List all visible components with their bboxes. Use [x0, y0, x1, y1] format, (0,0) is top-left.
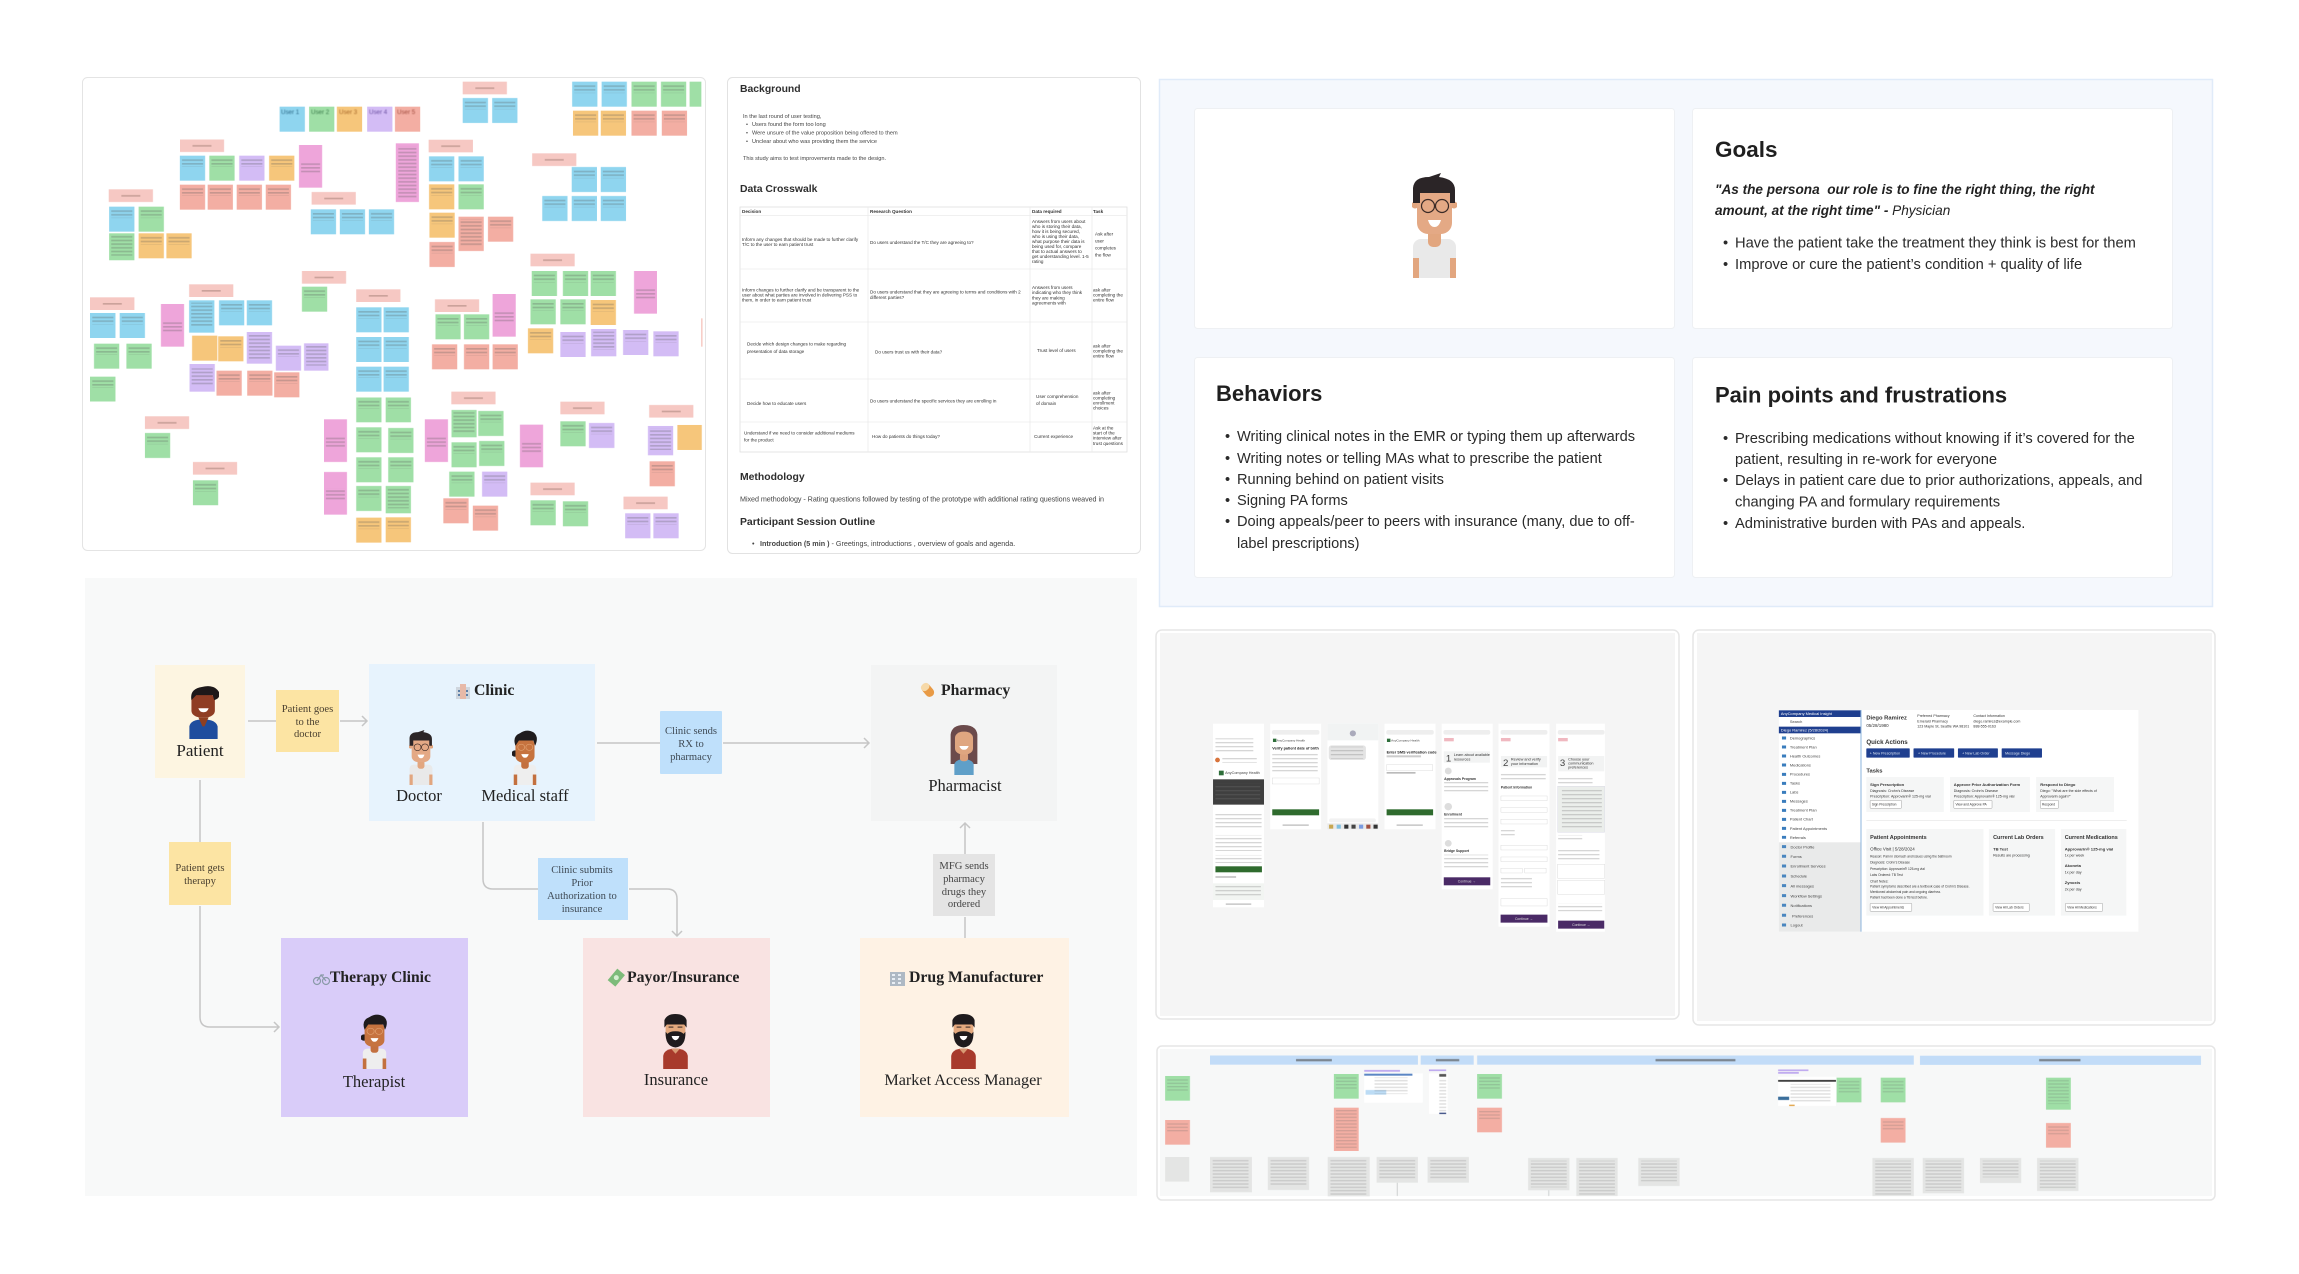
- heading: background: Background: [740, 84, 801, 95]
- text: background summary: Users found the form too long: [752, 122, 826, 128]
- icon: market access manager avatar: [951, 1014, 976, 1069]
- note: patient goes to the doctor: [276, 690, 339, 752]
- summary cards: Labs Ordered: TB Test: [1870, 873, 1903, 877]
- summary cards: Patient Appointments: [1870, 835, 1927, 841]
- heading: pain points and frustrations: Pain points and frustrations: [1715, 382, 2007, 408]
- note: clinic sends rx to pharmacy: Clinic sends: [665, 726, 717, 737]
- text: background summary: [743, 114, 898, 162]
- text: session outline item: - Greetings, introductions , overview of goals and agenda.: [831, 539, 1015, 548]
- table: data crosswalk: interview after: [1093, 436, 1122, 440]
- table: data crosswalk: start of the: [1093, 430, 1115, 436]
- table: data crosswalk: ask after: [1093, 344, 1111, 348]
- tasks: Sign Prescription: [1872, 803, 1897, 807]
- label: insurance: Insurance: [644, 1070, 708, 1089]
- panel: research synthesis timeline: [1157, 1046, 2215, 1200]
- note: clinic submits prior authorization: insurance: [562, 904, 603, 915]
- icon: insurance avatar: [663, 1014, 688, 1069]
- screen: step 2 review information: Review and verify: [1511, 758, 1541, 762]
- heading: participant session outline: Participant Session Outline: [740, 517, 875, 528]
- text: background summary: This study aims to test improvements made to the design.: [743, 156, 886, 162]
- patient header: Emerald Pharmacy: [1917, 719, 1948, 723]
- table: data crosswalk: choices: [1093, 406, 1109, 410]
- list: goals: [1723, 236, 2136, 273]
- note connectors: [1397, 1183, 1549, 1196]
- list: pain points: Prescribing medications without knowing if it’s covered for the: [1735, 431, 2135, 447]
- user legend labels: User 4: [369, 109, 388, 116]
- icon: medical staff avatar: [511, 731, 537, 785]
- icon: bicycle: [314, 975, 330, 984]
- table: data crosswalk: presentation of data storage: [747, 349, 805, 354]
- screen: sms message: [1327, 724, 1378, 829]
- panel: research plan document: [728, 78, 1140, 554]
- summary cards: 2x per day: [2065, 887, 2082, 891]
- quick actions: [1866, 739, 2042, 758]
- summary cards: Results are processing: [1993, 854, 2030, 858]
- icon: pill: [919, 681, 936, 699]
- screen: step 3 preferences: Choose your: [1568, 758, 1590, 762]
- note: patient goes to the doctor: doctor: [294, 729, 321, 740]
- text: background summary: In the last round of user testing,: [743, 114, 822, 120]
- label: patient: Patient: [176, 741, 224, 760]
- sidebar: Diego Ramirez (5/28/2024): [1781, 727, 1829, 732]
- sidebar: Procedures: [1790, 772, 1810, 777]
- table: data crosswalk: Understand if we need to consider additional mediums: [744, 430, 855, 436]
- table: data crosswalk: entire flow: [1093, 354, 1115, 358]
- note: clinic sends rx to pharmacy: pharmacy: [670, 752, 713, 763]
- table: data crosswalk: of domain: [1036, 401, 1057, 406]
- list: pain points: [1723, 431, 2142, 532]
- screen: step 1 resources: Enrollment: [1444, 812, 1463, 816]
- table: data crosswalk: Current experience: [1034, 434, 1074, 439]
- table: data crosswalk: User comprehension: [1036, 394, 1079, 399]
- patient header: [1866, 714, 2020, 729]
- screen: step 3 preferences: 3: [1560, 758, 1565, 769]
- arrow: patient to therapy clinic: [200, 780, 279, 1032]
- note: mfg sends pharmacy drugs: MFG sends: [939, 861, 989, 872]
- card: persona portrait: [1194, 108, 1674, 328]
- sidebar: Health Outcomes: [1790, 753, 1820, 758]
- table: data crosswalk: for the product: [744, 438, 774, 442]
- tasks: Diego: "What are the side effects of: [2040, 789, 2097, 793]
- box: pharmacy: [871, 665, 1057, 821]
- sidebar: Doctor Profile: [1791, 844, 1814, 849]
- list: goals: Have the patient take the treatment they think is best for them: [1735, 236, 2136, 252]
- research notes: [1210, 1157, 2078, 1196]
- summary cards: TB Test: [1993, 846, 2009, 851]
- icon: therapist avatar: [360, 1015, 387, 1069]
- note: patient gets therapy: [169, 842, 231, 905]
- sidebar: Treatment Plan: [1790, 808, 1817, 813]
- list: pain points: •: [1723, 473, 1728, 489]
- table: data crosswalk: rating: [1032, 259, 1044, 264]
- sidebar: Labs: [1790, 790, 1798, 795]
- list: goals: •: [1723, 257, 1728, 273]
- summary cards: Current Lab Orders: [1993, 835, 2044, 841]
- tasks: [1866, 769, 2114, 812]
- summary cards: Akoneta: [2065, 863, 2082, 868]
- screen: step 2 review information: your information: [1511, 762, 1538, 766]
- note: clinic submits prior authorization: Authorization to: [547, 891, 617, 902]
- list: behaviors: •: [1225, 493, 1230, 509]
- table: data crosswalk: Decide how to educate users: [747, 401, 807, 406]
- heading: goals: Goals: [1715, 137, 1778, 162]
- list: pain points: changing PA and formulary requirements: [1735, 494, 2000, 510]
- table: data crosswalk: [740, 207, 1127, 452]
- user legend labels: User 2: [311, 109, 330, 116]
- sidebar: Search: [1790, 719, 1802, 724]
- icon: physician avatar: [1412, 173, 1458, 278]
- text: background summary: Were unsure of the value proposition being offered to them: [752, 130, 898, 136]
- table: data crosswalk: user: [1095, 238, 1104, 244]
- list: pain points: Delays in patient care due to prior authorizations, appeals, and: [1735, 473, 2142, 489]
- text: background summary: •: [746, 139, 748, 145]
- card: behaviors: [1194, 358, 1674, 578]
- screen: verify date of birth: [1270, 724, 1321, 829]
- screen: step 1 resources: resources: [1454, 757, 1470, 761]
- screen: verify date of birth: Verify patient date of birth: [1272, 747, 1320, 751]
- text: session outline item: Introduction (5 min ): [760, 539, 830, 548]
- heading: methodology: Methodology: [740, 472, 805, 483]
- list: pain points: Administrative burden with PAs and appeals.: [1735, 516, 2025, 532]
- list: behaviors: •: [1225, 429, 1230, 445]
- list: pain points: •: [1723, 516, 1728, 532]
- summary cards: Office Visit | 5/28/2024: [1870, 846, 1915, 851]
- sidebar: Preferences: [1792, 913, 1813, 918]
- table: data crosswalk: who is using their data,: [1032, 234, 1079, 239]
- list: goals: Improve or cure the patient’s condition + quality of life: [1735, 257, 2082, 273]
- table: data crosswalk: enrollment: [1093, 400, 1115, 406]
- patient header: diego.ramirez@example.com: [1973, 719, 2020, 723]
- user legend labels: [281, 109, 416, 116]
- text: session outline item: •: [752, 539, 755, 548]
- screen: sms verification code: Enter SMS verification code: [1387, 750, 1437, 754]
- table: data crosswalk: Do users trust us with their data?: [875, 350, 943, 354]
- list: pain points: •: [1723, 431, 1728, 447]
- summary cards: View All Appointments: [1872, 906, 1905, 910]
- box: payor insurance: [583, 938, 770, 1117]
- sidebar: Enrollment Services: [1791, 864, 1826, 869]
- title: payor insurance: Payor/Insurance: [627, 969, 739, 986]
- screen: step 2 review information: 2: [1503, 758, 1508, 769]
- panel: provider dashboard screen: [1693, 630, 2215, 1025]
- sidebar: Tasks: [1790, 781, 1800, 786]
- phase headers: [1210, 1055, 2201, 1065]
- table: data crosswalk: Trust level of users: [1037, 348, 1076, 353]
- summary cards: View All Medications: [2067, 906, 2097, 910]
- summary cards: Mentioned abdominal pain and ongoing diarrhea.: [1870, 890, 1941, 894]
- note: mfg sends pharmacy drugs: pharmacy: [943, 874, 986, 885]
- screen: email: AnyCompany Health: [1225, 771, 1260, 775]
- summary cards: Current Medications: [2065, 835, 2118, 841]
- list: behaviors: •: [1225, 451, 1230, 467]
- table: data crosswalk: who is storing their data,: [1032, 224, 1082, 229]
- summary cards: Diagnosis: Crohn's Disease: [1870, 860, 1910, 864]
- icon: office building: [890, 972, 905, 986]
- screen: step 1 resources: 1: [1446, 753, 1451, 764]
- icon: doctor avatar: [409, 730, 433, 785]
- table: data crosswalk: completing the: [1093, 348, 1123, 354]
- sidebar: Notifications: [1791, 903, 1812, 908]
- summary cards: View All Lab Orders: [1995, 906, 2024, 910]
- summary cards: Zynoxis: [2065, 880, 2081, 885]
- title: pharmacy: Pharmacy: [941, 682, 1010, 699]
- tasks: Tasks: [1866, 769, 1882, 775]
- heading: behaviors: Behaviors: [1216, 381, 1322, 406]
- screen: step 2 review information: [1499, 724, 1550, 927]
- table: data crosswalk: ask after: [1093, 390, 1111, 396]
- table: data crosswalk: Do users understand the specific services they are enrolling in: [870, 398, 997, 404]
- table: data crosswalk: Do users understand that they are agreeing to terms and conditions with 2: [870, 290, 1021, 294]
- panel: service blueprint of stakeholders: [85, 578, 1137, 1196]
- arrow: clinic to payor: [483, 822, 682, 936]
- table: data crosswalk: Do users understand the T/C they are agreeing to?: [870, 240, 974, 245]
- tasks: Prescription: Approvarin® 125-mg vial: [1870, 794, 1931, 798]
- table: data crosswalk: that to actual answers to: [1032, 249, 1082, 254]
- table: data crosswalk: How do patients do things today?: [872, 434, 940, 439]
- table: data crosswalk: what purpose their data is: [1032, 239, 1085, 244]
- user legend labels: User 3: [339, 109, 358, 116]
- box: drug manufacturer: [860, 938, 1069, 1117]
- table: data crosswalk: ask after: [1093, 288, 1111, 292]
- sidebar: Forms: [1791, 854, 1802, 859]
- table: data crosswalk: completing: [1093, 396, 1116, 400]
- summary cards: 1x per week: [2065, 854, 2084, 858]
- screen: step 1 resources: Continue →: [1458, 880, 1476, 884]
- quick actions: Message Diego: [2005, 751, 2030, 755]
- patient header: Preferred Pharmacy: [1917, 714, 1950, 718]
- note: mfg sends pharmacy drugs: ordered: [948, 899, 981, 910]
- table: data crosswalk: different parties?: [870, 295, 905, 300]
- table: data crosswalk: T/C to the user to earn patient trust: [742, 242, 814, 247]
- sticky notes: [90, 82, 702, 543]
- table: data crosswalk: Ask after: [1095, 232, 1114, 236]
- table: data crosswalk: Decision: [742, 209, 761, 214]
- tasks: Sign Prescription: [1870, 782, 1905, 787]
- panel: persona: [1160, 80, 2212, 606]
- list: behaviors: [1225, 429, 1635, 552]
- tasks: View and Approve PA: [1956, 803, 1988, 807]
- screen: step 3 preferences: Continue →: [1572, 923, 1590, 927]
- table: data crosswalk: agreements with: [1032, 300, 1066, 306]
- sidebar: Logout: [1791, 923, 1804, 928]
- table: data crosswalk: indicating who they think: [1032, 290, 1083, 295]
- table: data crosswalk: Data required: [1032, 209, 1062, 214]
- sidebar: Demographics: [1790, 735, 1815, 740]
- summary cards: Approvarin® 125-mg vial: [2065, 846, 2113, 851]
- screen: step 2 review information: Patient Information: [1501, 786, 1532, 790]
- screen: step 3 preferences: preferences: [1568, 766, 1588, 770]
- quick actions: + New Lab Order: [1962, 751, 1990, 755]
- summary cards: [1866, 829, 2126, 916]
- sidebar: Messages: [1790, 799, 1808, 804]
- sidebar: Patient Chart: [1790, 817, 1814, 822]
- arrow: clinic to pharmacy: [597, 738, 869, 748]
- sidebar: Workflow Settings: [1791, 893, 1822, 898]
- box: clinic: [369, 664, 595, 821]
- list: behaviors: Signing PA forms: [1237, 493, 1348, 509]
- table: data crosswalk: Answers from users: [1032, 285, 1073, 290]
- label: pharmacist: Pharmacist: [928, 776, 1002, 795]
- icon: pharmacist avatar: [951, 725, 977, 775]
- card: goals: [1692, 108, 2172, 328]
- quick actions: + New Procedure: [1918, 751, 1946, 755]
- tasks: Respond: [2042, 803, 2055, 807]
- table: data crosswalk: entire flow: [1093, 298, 1115, 302]
- screen: step 1 resources: Learn about available: [1454, 753, 1490, 757]
- note: clinic submits prior authorization: Prior: [571, 878, 593, 889]
- sidebar: All messages: [1791, 883, 1814, 888]
- finding sticky notes: [1165, 1074, 2071, 1182]
- table: data crosswalk: user about what parties are involved in delivering PSS to: [742, 292, 858, 298]
- patient header: 123 Maple St, Seattle WA 98101: [1917, 725, 1969, 729]
- table: data crosswalk: the flow: [1095, 252, 1112, 258]
- list: pain points: patient, resulting in re-work for everyone: [1735, 452, 1997, 468]
- summary cards: Patient had been done a TB test before.: [1870, 895, 1928, 899]
- tasks: Diagnosis: Crohn's Disease: [1954, 789, 1998, 793]
- screen: sms verification code: [1385, 724, 1437, 829]
- note: clinic submits prior authorization: [538, 858, 628, 920]
- tasks: Approve Prior Authorization Form: [1954, 782, 2021, 787]
- note: patient goes to the doctor: to the: [296, 717, 320, 728]
- note: clinic sends rx to pharmacy: RX to: [678, 739, 704, 750]
- box: patient: [155, 665, 245, 778]
- table: data crosswalk: completes: [1095, 246, 1117, 250]
- list: behaviors: Writing clinical notes in the EMR or typing them up afterwards: [1237, 429, 1635, 445]
- table: data crosswalk: completing the: [1093, 292, 1123, 298]
- icon: patient avatar: [189, 686, 219, 739]
- list: behaviors: Writing notes or telling MAs what to prescribe the patient: [1237, 451, 1602, 467]
- table: data crosswalk: how it is being secured,: [1032, 229, 1080, 234]
- table: data crosswalk: Ask at the: [1093, 426, 1114, 430]
- note: patient goes to the doctor: Patient goes: [282, 704, 333, 715]
- text: background summary: •: [746, 130, 748, 136]
- note: mfg sends pharmacy drugs: drugs they: [942, 887, 987, 898]
- text: background summary: Unclear about who was providing them the service: [752, 139, 877, 145]
- note: patient gets therapy: therapy: [184, 876, 217, 887]
- list: behaviors: •: [1225, 472, 1230, 488]
- table: data crosswalk: Research Question: [870, 209, 912, 214]
- research note text lines: [1213, 1160, 2076, 1195]
- user legend labels: User 5: [397, 109, 416, 116]
- patient header: 05/28/1980: [1866, 723, 1889, 728]
- screen: step 1 resources: Approvals Program: [1444, 777, 1476, 781]
- label: medical staff: Medical staff: [481, 786, 569, 805]
- patient header: Contact Information: [1973, 714, 2005, 718]
- summary cards: Reason: Pain in stomach and issues using the bathroom: [1870, 854, 1952, 858]
- patient header: 888-555-0163: [1973, 725, 1996, 729]
- note: clinic sends rx to pharmacy: [660, 711, 722, 774]
- summary cards: Prescription: Approvarin® 125-mg vial: [1870, 867, 1925, 871]
- list: goals: •: [1723, 236, 1728, 252]
- screen: sms verification code: AnyCompany Health: [1391, 738, 1420, 742]
- arrow: patient to clinic: [248, 716, 367, 726]
- table: data crosswalk: Inform any changes that should be made to further clarify: [742, 237, 859, 242]
- text: physician quote: amount, at the right time" - Physician: [1715, 203, 1950, 218]
- icon: hospital: [456, 684, 470, 699]
- summary cards: Patient symptoms described are a textbook case of Crohn's Disease.: [1870, 885, 1970, 889]
- panel: affinity map of sticky notes: [82, 78, 706, 550]
- box: therapy clinic: [281, 938, 468, 1117]
- list: behaviors: Running behind on patient visits: [1237, 472, 1444, 488]
- screen: email: [1213, 724, 1264, 907]
- tasks: Prescription: Approvarin® 125-mg vial: [1954, 794, 2015, 798]
- screen: verify date of birth: AnyCompany Health: [1277, 738, 1305, 742]
- sidebar: Schedule: [1791, 874, 1807, 879]
- table: data crosswalk: Inform changes to further clarify and be transparent to the: [742, 288, 860, 292]
- label: doctor: Doctor: [396, 786, 442, 805]
- arrow: manufacturer to pharmacy: [960, 823, 970, 938]
- note: mfg sends pharmacy drugs: [933, 854, 995, 916]
- tasks: Diagnosis: Crohn's Disease: [1870, 789, 1914, 793]
- title: clinic: Clinic: [474, 682, 514, 699]
- title: therapy clinic: Therapy Clinic: [330, 969, 431, 986]
- sidebar: Medications: [1790, 762, 1811, 767]
- screen: step 3 preferences: [1556, 724, 1605, 932]
- text: physician quote: [1715, 182, 2095, 218]
- table: data crosswalk: Answers from users about: [1032, 219, 1086, 224]
- patient header: Diego Ramirez: [1866, 715, 1907, 721]
- list: behaviors: label prescriptions): [1237, 536, 1359, 552]
- user legend labels: User 1: [281, 109, 300, 116]
- card: pain points: [1692, 358, 2172, 578]
- screen: step 1 resources: Bridge Support: [1444, 849, 1470, 853]
- screen: step 2 review information: Continue →: [1515, 917, 1533, 921]
- list: behaviors: Doing appeals/peer to peers with insurance (many, due to off-: [1237, 514, 1635, 530]
- sidebar: Treatment Plan: [1790, 744, 1817, 749]
- sidebar: AnyCompany Medical Insight: [1781, 711, 1833, 716]
- screen captions: [1364, 1069, 1808, 1074]
- screen thumbnails: [1364, 1073, 1836, 1114]
- tasks: Respond to Diego: [2040, 782, 2076, 787]
- table: data crosswalk: get understanding level. 1-5: [1032, 254, 1089, 259]
- table: data crosswalk: they are making: [1032, 296, 1065, 300]
- sidebar: [1779, 710, 2138, 932]
- note: patient gets therapy: Patient gets: [175, 863, 225, 874]
- screen: step 3 preferences: communication: [1568, 762, 1594, 766]
- table: data crosswalk: Decide which design changes to make regarding: [747, 342, 847, 346]
- text: background summary: •: [746, 122, 748, 128]
- sidebar: Patient Appointments: [1790, 826, 1827, 831]
- summary cards: 1x per day: [2065, 871, 2082, 875]
- text: physician quote: "As the persona our role is to fine the right thing, the right: [1715, 182, 2095, 197]
- title: drug manufacturer: Drug Manufacturer: [909, 969, 1043, 986]
- panel: mobile screen flow: [1156, 630, 1679, 1019]
- screen: step 1 resources: [1442, 724, 1493, 889]
- sidebar: Referrals: [1790, 835, 1806, 840]
- note: clinic submits prior authorization: Clinic submits: [551, 865, 613, 876]
- icon: money: [608, 969, 625, 987]
- heading: data crosswalk: Data Crosswalk: [740, 184, 818, 195]
- table: data crosswalk: them, in order to earn patient trust: [742, 298, 812, 302]
- phase header captions: [1296, 1059, 2080, 1061]
- table: data crosswalk: trust questions: [1093, 441, 1124, 446]
- text: methodology summary: Mixed methodology - Rating questions followed by testing of the prototype with additional rating questions weaved in: [740, 494, 1104, 504]
- table: data crosswalk: being used for, compare: [1032, 244, 1082, 249]
- summary cards: Chart Notes:: [1870, 879, 1889, 883]
- quick actions: + New Prescription: [1870, 751, 1900, 755]
- list: behaviors: •: [1225, 514, 1230, 530]
- label: therapist: Therapist: [343, 1072, 406, 1091]
- label: market access manager: Market Access Manager: [884, 1071, 1042, 1089]
- tasks: Approvarin again?": [2040, 794, 2072, 798]
- quick actions: Quick Actions: [1866, 739, 1908, 746]
- table: data crosswalk: Task: [1093, 209, 1104, 214]
